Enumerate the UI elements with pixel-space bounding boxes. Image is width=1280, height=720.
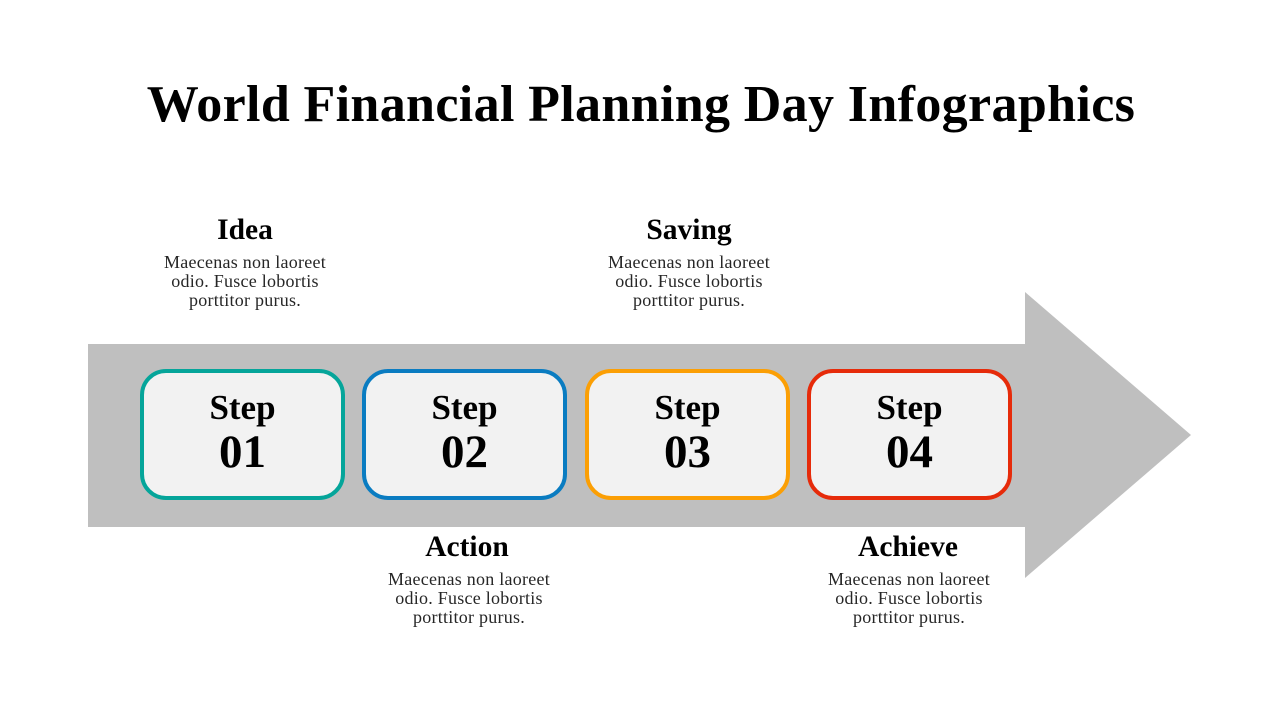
text: Action: Action bbox=[425, 531, 509, 563]
text: Action bbox=[388, 531, 550, 627]
step 02 box: Step bbox=[431, 388, 498, 427]
step 04 box: Step bbox=[876, 388, 943, 427]
step 01 box: 01 bbox=[219, 426, 266, 478]
title: World Financial Planning Day Infographics bbox=[147, 76, 1135, 133]
step 02 box bbox=[362, 369, 567, 500]
step 01 box: Step bbox=[209, 388, 276, 427]
text: Idea bbox=[164, 214, 326, 310]
text: Action: porttitor purus. bbox=[413, 607, 525, 627]
text: Achieve: porttitor purus. bbox=[853, 607, 965, 627]
text: Action: Maecenas non laoreet bbox=[388, 569, 550, 589]
text: Action: odio. Fusce lobortis bbox=[395, 588, 543, 608]
step 03 box: 03 bbox=[664, 426, 711, 478]
step 03 box bbox=[585, 369, 790, 500]
text: Saving: odio. Fusce lobortis bbox=[615, 271, 763, 291]
step 03 box: Step bbox=[654, 388, 721, 427]
text: Idea: Maecenas non laoreet bbox=[164, 252, 326, 272]
text: Achieve bbox=[828, 531, 990, 627]
text: Achieve: Maecenas non laoreet bbox=[828, 569, 990, 589]
step 04 box: 04 bbox=[886, 426, 933, 478]
text: Saving bbox=[608, 214, 770, 310]
step 04 box bbox=[807, 369, 1012, 500]
text: Achieve: Achieve bbox=[858, 531, 958, 563]
text: Saving: porttitor purus. bbox=[633, 290, 745, 310]
text: Idea: Idea bbox=[217, 214, 273, 246]
text: Idea: porttitor purus. bbox=[189, 290, 301, 310]
text: Saving: Maecenas non laoreet bbox=[608, 252, 770, 272]
step 02 box: 02 bbox=[441, 426, 488, 478]
text: Achieve: odio. Fusce lobortis bbox=[835, 588, 983, 608]
text: Saving: Saving bbox=[646, 214, 732, 246]
text: Idea: odio. Fusce lobortis bbox=[171, 271, 319, 291]
step 01 box bbox=[140, 369, 345, 500]
